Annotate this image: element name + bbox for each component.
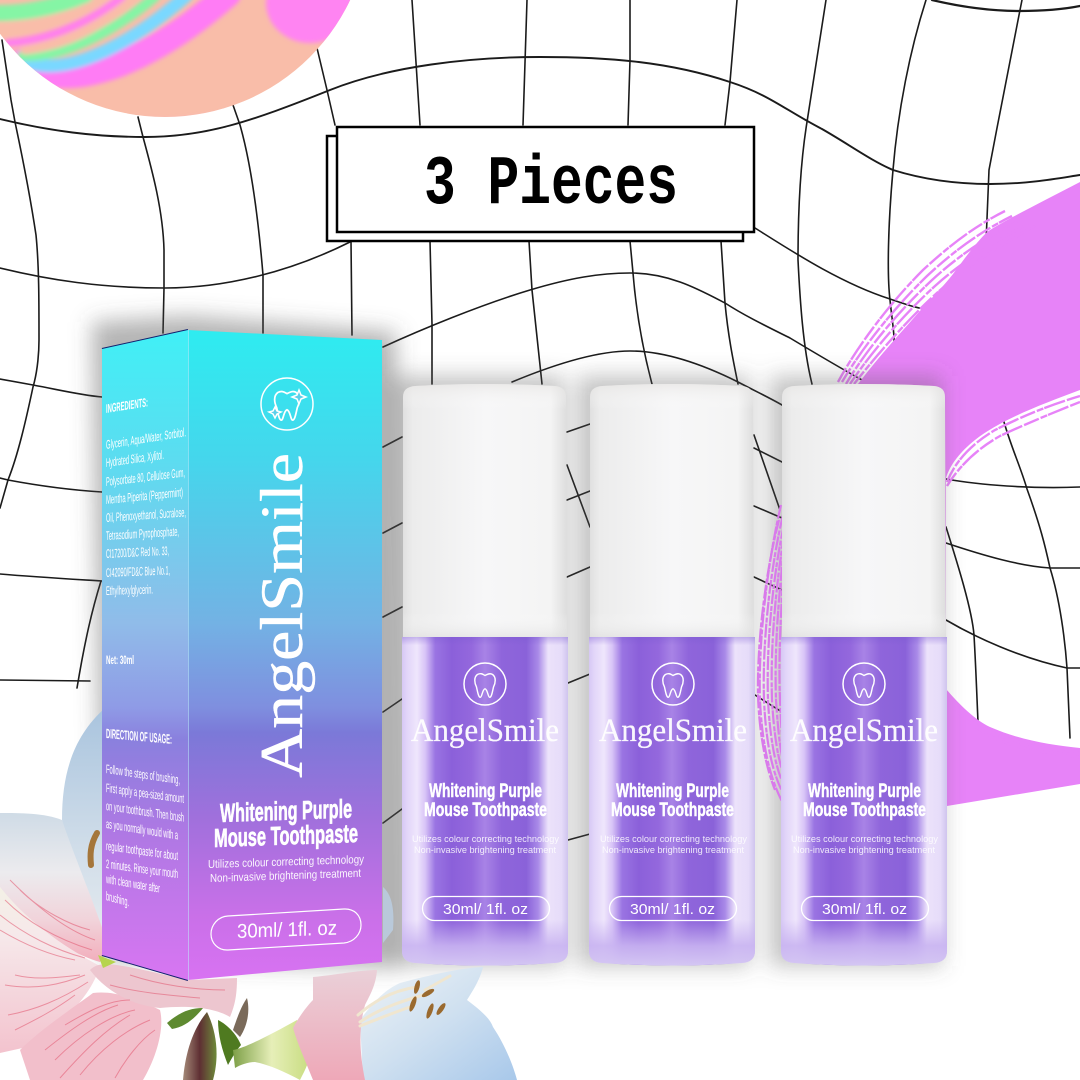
product box: Oil, Phenoxyethanol, Sucralose, — [106, 505, 186, 525]
petal: right pink — [293, 970, 377, 1080]
bottle tagline: Utilizes colour correcting technology — [791, 834, 938, 845]
box ingredients text: Hydrated Silica, Xylitol. — [106, 448, 164, 470]
box directions text: DIRECTION OF USAGE: — [106, 726, 172, 747]
product box: Glycerin, Aqua/Water, Sorbitol. — [106, 425, 186, 452]
box directions text: with clean water after — [106, 872, 160, 896]
pink paint brush swoosh — [838, 182, 1080, 806]
box logo icon — [261, 378, 313, 430]
bottle product name: Whitening Purple — [616, 781, 729, 802]
petal: bottom pink — [20, 992, 161, 1080]
box ingredients text: INGREDIENTS: — [106, 395, 148, 416]
petal stripes — [0, 880, 368, 1078]
product box: as you normally would with a — [106, 817, 178, 843]
bottle product name — [803, 781, 926, 821]
petal: blue upper — [62, 708, 108, 960]
bottle cap — [403, 384, 567, 638]
box front panel — [188, 330, 382, 980]
bottle volume pill: 30ml/ 1fl. oz — [443, 901, 528, 918]
flowers: lily blossoms at the bottom — [0, 708, 517, 1080]
title banner — [327, 127, 754, 241]
bottle product name: Mouse Toothpaste — [611, 800, 734, 821]
box directions text: brushing. — [106, 888, 129, 909]
bottle volume pill: 30ml/ 1fl. oz — [630, 901, 715, 918]
bottle body — [781, 637, 947, 966]
bottle volume pill — [610, 896, 736, 920]
soft drop shadows behind the products — [92, 316, 942, 968]
petal: blue sliver beside box — [383, 887, 393, 943]
bottle product name — [611, 781, 734, 821]
bottle tagline: Utilizes colour correcting technology — [412, 834, 559, 845]
box directions text: regular toothpaste for about — [106, 839, 178, 863]
bottle tagline: Utilizes colour correcting technology — [600, 834, 747, 845]
bottle product name — [424, 781, 547, 821]
box volume pill — [211, 909, 361, 950]
bottle volume pill: 30ml/ 1fl. oz — [822, 901, 907, 918]
stamens — [358, 976, 450, 1026]
bottle tagline: Non-invasive brightening treatment — [414, 845, 556, 856]
product box: Polysorbate 80, Cellulose Gum, — [106, 466, 185, 489]
bottle 2 — [589, 384, 755, 966]
title text: 3 Pieces — [424, 146, 678, 225]
box tagline: Non-invasive brightening treatment — [210, 868, 362, 885]
brown stamen left — [91, 833, 97, 865]
product box: 2 minutes. Rinse your mouth — [106, 857, 178, 881]
box brand name vertical: AngelSmile — [249, 453, 315, 778]
bottle product name: Mouse Toothpaste — [424, 800, 547, 821]
petal: centre pink — [90, 964, 237, 1017]
petal: upper left — [0, 813, 108, 962]
bottle volume pill — [802, 896, 928, 920]
petal: lower left — [0, 887, 100, 1053]
bottle tagline — [791, 834, 938, 856]
bottle brand name: AngelSmile — [790, 713, 938, 749]
bottle volume pill — [422, 896, 550, 920]
bottle 1 — [402, 384, 568, 966]
product box: on your toothbrush. Then brush — [106, 799, 184, 825]
box ingredients text — [106, 395, 186, 598]
product box: First apply a pea-sized amount — [106, 781, 184, 806]
box side panel — [102, 330, 188, 980]
product box — [102, 330, 382, 980]
box ingredients text: Ethylhexylglycerin. — [106, 583, 153, 598]
bottle product name: Mouse Toothpaste — [803, 800, 926, 821]
box ingredients text: Tetrasodium Pyrophosphate, — [106, 525, 179, 543]
iridescent disc top left — [0, 0, 365, 123]
box volume pill: 30ml/ 1fl. oz — [237, 918, 337, 943]
bottle brand name: AngelSmile — [599, 713, 747, 749]
bottle brand name: AngelSmile — [411, 713, 559, 749]
box product name — [214, 793, 358, 853]
faint brush strokes between bottles — [758, 505, 784, 805]
bottle 3 — [781, 384, 947, 966]
box ingredients text: CI42090/FD&C Blue No.1, — [106, 563, 170, 580]
bottle product name: Whitening Purple — [429, 781, 542, 802]
bottle body — [589, 637, 755, 966]
warped black grid — [0, 0, 1080, 840]
bottle tagline: Non-invasive brightening treatment — [602, 845, 744, 856]
box ingredients text: CI17200/D&C Red No. 33, — [106, 544, 169, 561]
box tagline — [208, 854, 364, 885]
box net volume text: Net: 30ml — [106, 653, 134, 667]
product box: Mentha Piperita (Peppermint) — [106, 485, 183, 507]
bottle body — [402, 637, 568, 966]
box product name: Mouse Toothpaste — [214, 818, 358, 853]
lime petal base — [98, 955, 116, 968]
box directions text — [106, 726, 184, 909]
bottle logo icon — [652, 663, 694, 705]
flower bud and stems — [183, 1012, 217, 1080]
bottle cap — [590, 384, 754, 638]
box tagline: Utilizes colour correcting technology — [208, 854, 364, 871]
bottle product name: Whitening Purple — [808, 781, 921, 802]
bottle logo icon — [464, 663, 506, 705]
petal: right sky blue — [360, 967, 517, 1080]
anthers — [408, 980, 447, 1019]
product box: Follow the steps of brushing, — [106, 762, 180, 787]
box product name: Whitening Purple — [220, 793, 352, 828]
bottle tagline: Non-invasive brightening treatment — [793, 845, 935, 856]
bottle tagline — [600, 834, 747, 856]
bottle tagline — [412, 834, 559, 856]
bottle cap — [782, 384, 946, 638]
bottle logo icon — [843, 663, 885, 705]
